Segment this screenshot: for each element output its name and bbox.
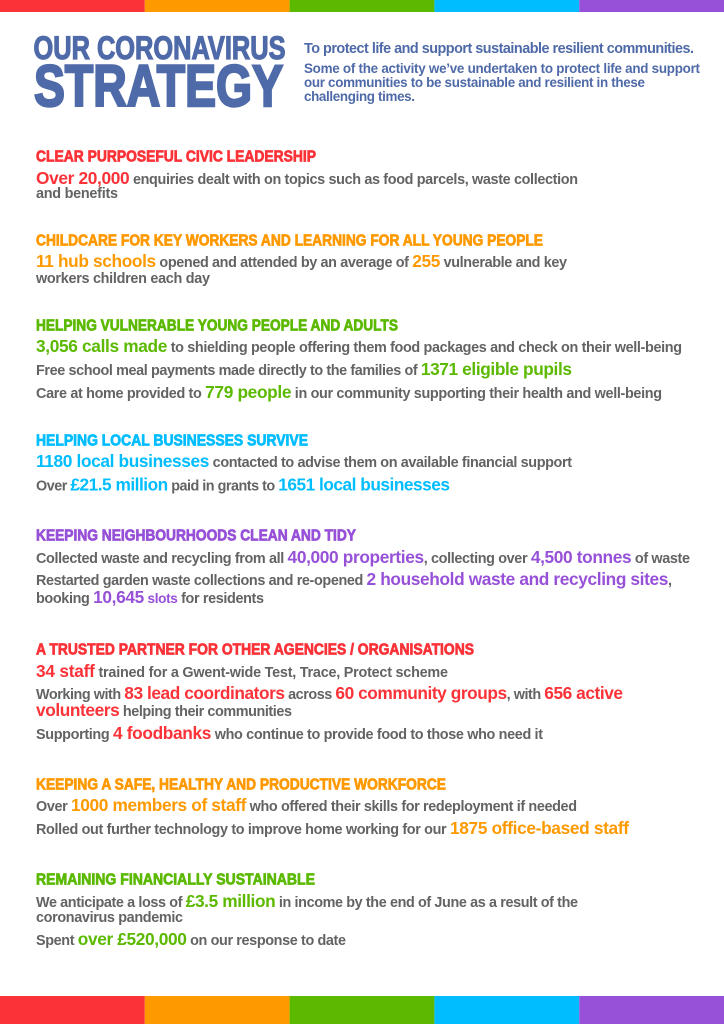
intro text: To protect life and support sustainable resilient communities. — [304, 41, 694, 57]
section: workforce: Over 1000 members of staff who offered their skills for redeployment if needed — [36, 795, 577, 815]
section: workforce: KEEPING A SAFE, HEALTHY AND PRODUCTIVE WORKFORCE — [36, 776, 446, 794]
section: vulnerable people — [36, 318, 682, 402]
title: STRATEGY — [34, 54, 283, 119]
section: trusted partner: 34 staff trained for a Gwent-wide Test, Trace, Protect scheme — [36, 661, 448, 681]
section: childcare: CHILDCARE FOR KEY WORKERS AND LEARNING FOR ALL YOUNG PEOPLE — [36, 232, 543, 250]
section: local businesses: HELPING LOCAL BUSINESSES SURVIVE — [36, 432, 308, 450]
bottom rainbow bar — [0, 996, 724, 1024]
section: vulnerable people: 3,056 calls made to shielding people offering them food packages and check on their well-being — [36, 336, 682, 356]
section: neighbourhoods: Restarted garden waste collections and re-opened 2 household waste and recycling sites, — [36, 569, 672, 589]
section: trusted partner: Supporting 4 foodbanks who continue to provide food to those who need it — [36, 723, 543, 743]
section: neighbourhoods: Collected waste and recycling from all 40,000 properties, collecting over 4,500 tonnes of waste — [36, 547, 690, 567]
section: neighbourhoods: booking 10,645 slots for residents — [36, 587, 264, 607]
section: financially sustainable: Spent over £520,000 on our response to date — [36, 929, 346, 949]
section: local businesses — [36, 432, 572, 494]
section: childcare: workers children each day — [35, 271, 210, 287]
intro text — [304, 41, 701, 104]
section: financially sustainable — [36, 872, 578, 949]
section: vulnerable people: HELPING VULNERABLE YOUNG PEOPLE AND ADULTS — [36, 318, 398, 334]
section: trusted partner — [36, 642, 623, 743]
section: civic leadership: Over 20,000 enquiries dealt with on topics such as food parcels, waste collection — [36, 168, 578, 188]
section: vulnerable people: Free school meal payments made directly to the families of 1371 eligible pupils — [36, 359, 572, 379]
section: neighbourhoods — [36, 528, 690, 607]
section: financially sustainable: REMAINING FINANCIALLY SUSTAINABLE — [36, 872, 315, 888]
section: trusted partner: volunteers helping their communities — [36, 700, 292, 720]
section: trusted partner: A TRUSTED PARTNER FOR OTHER AGENCIES / ORGANISATIONS — [36, 642, 474, 658]
intro text: our communities to be sustainable and resilient in these — [304, 75, 645, 90]
title — [34, 30, 286, 119]
top rainbow bar — [0, 0, 724, 12]
section: local businesses: Over £21.5 million paid in grants to 1651 local businesses — [36, 474, 450, 494]
title: OUR CORONAVIRUS — [34, 30, 286, 66]
section: local businesses: 1180 local businesses contacted to advise them on available financial support — [36, 451, 572, 471]
section: trusted partner: Working with 83 lead coordinators across 60 community groups, with 656 active — [36, 683, 623, 703]
section: workforce — [36, 776, 629, 838]
section: vulnerable people: Care at home provided to 779 people in our community supporting their health and well-being — [36, 382, 662, 402]
section: childcare: 11 hub schools opened and attended by an average of 255 vulnerable and key — [36, 251, 567, 271]
section: civic leadership — [36, 148, 578, 202]
section: financially sustainable: coronavirus pandemic — [36, 910, 183, 926]
section: civic leadership: CLEAR PURPOSEFUL CIVIC LEADERSHIP — [36, 148, 316, 166]
section: workforce: Rolled out further technology to improve home working for our 1875 office-based staff — [36, 818, 629, 838]
intro text: Some of the activity we’ve undertaken to protect life and support — [304, 61, 701, 76]
intro text: challenging times. — [304, 89, 415, 104]
section: childcare — [35, 232, 567, 287]
section: financially sustainable: We anticipate a loss of £3.5 million in income by the end of June as a result of the — [36, 891, 578, 911]
section: civic leadership: and benefits — [36, 186, 118, 202]
section: neighbourhoods: KEEPING NEIGHBOURHOODS CLEAN AND TIDY — [36, 528, 357, 544]
